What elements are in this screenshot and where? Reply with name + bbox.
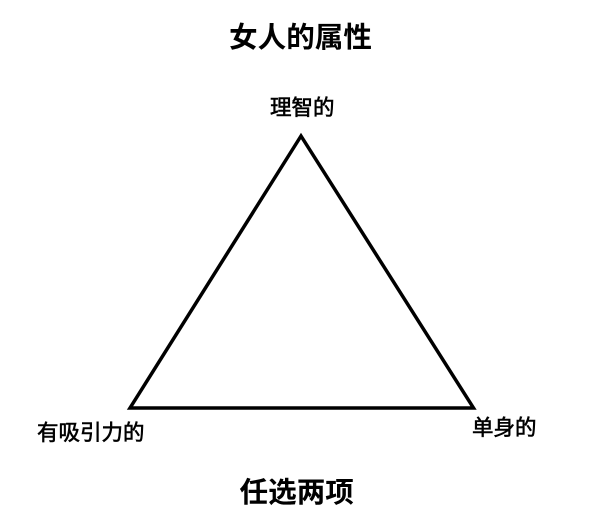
label: top vertex: 理智的 <box>270 96 335 120</box>
label: bottom-left vertex: 有吸引力的 <box>37 421 145 445</box>
label: bottom-right vertex: 单身的 <box>472 416 537 440</box>
footer caption: 任选两项 <box>240 477 354 509</box>
title: 女人的属性 <box>229 22 372 54</box>
